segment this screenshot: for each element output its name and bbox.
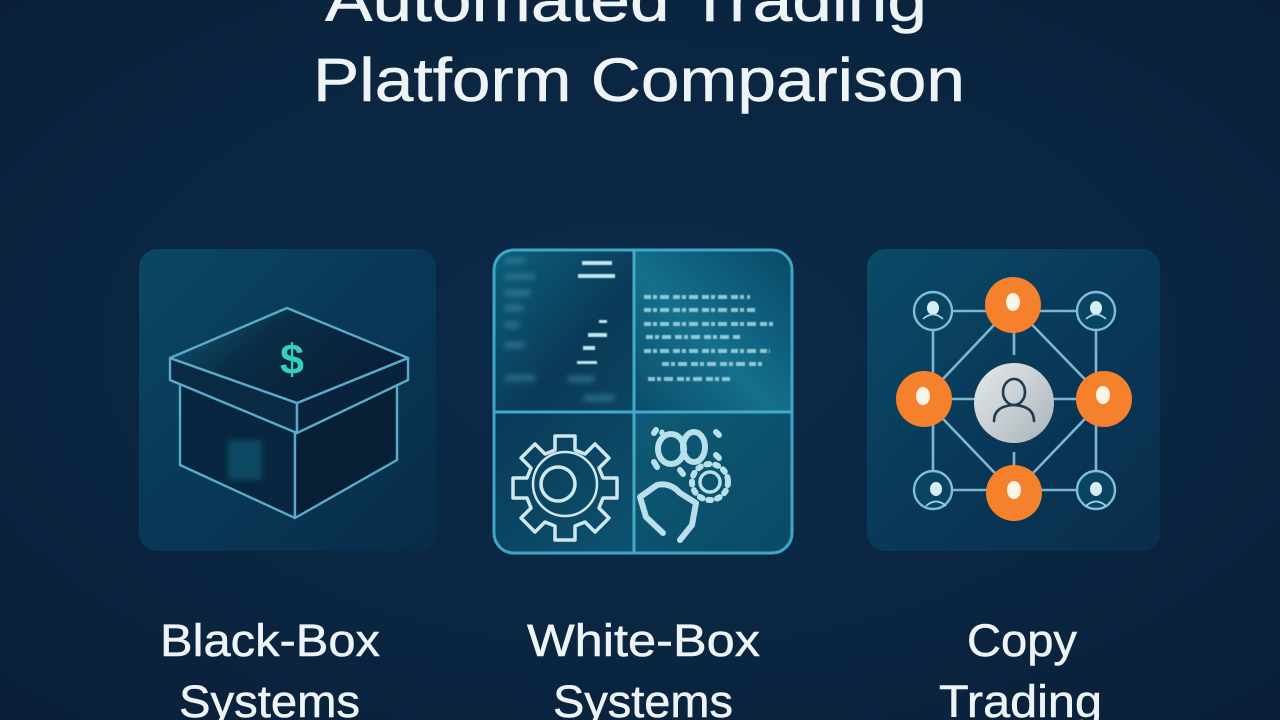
panel: copy trading: [867, 249, 1160, 551]
panel: white-box systems: [494, 250, 792, 553]
label: white-box systems: [527, 615, 761, 720]
network connecting lines: [924, 305, 1104, 493]
icon: cluster of gears: [640, 430, 728, 540]
icon: central person: [974, 363, 1054, 443]
icon: black box with dollar sign: [170, 308, 408, 518]
label: copy trading: [939, 615, 1102, 720]
icon: dollar sign: $: [280, 336, 304, 384]
label: black-box systems: Black-Box: [160, 615, 381, 666]
panel: black-box systems: [139, 249, 436, 551]
title: [313, 0, 965, 114]
code lines left: [577, 261, 615, 364]
code text right: [644, 297, 775, 379]
icon: orange leader nodes: [896, 277, 1132, 521]
label: white-box systems: White-Box: [527, 615, 761, 666]
icon: follower nodes: [914, 292, 1115, 509]
label: black-box systems: [160, 615, 381, 720]
label: copy trading: Copy: [967, 615, 1078, 666]
icon: single gear: [513, 436, 617, 540]
title: Platform Comparison: [313, 46, 965, 114]
